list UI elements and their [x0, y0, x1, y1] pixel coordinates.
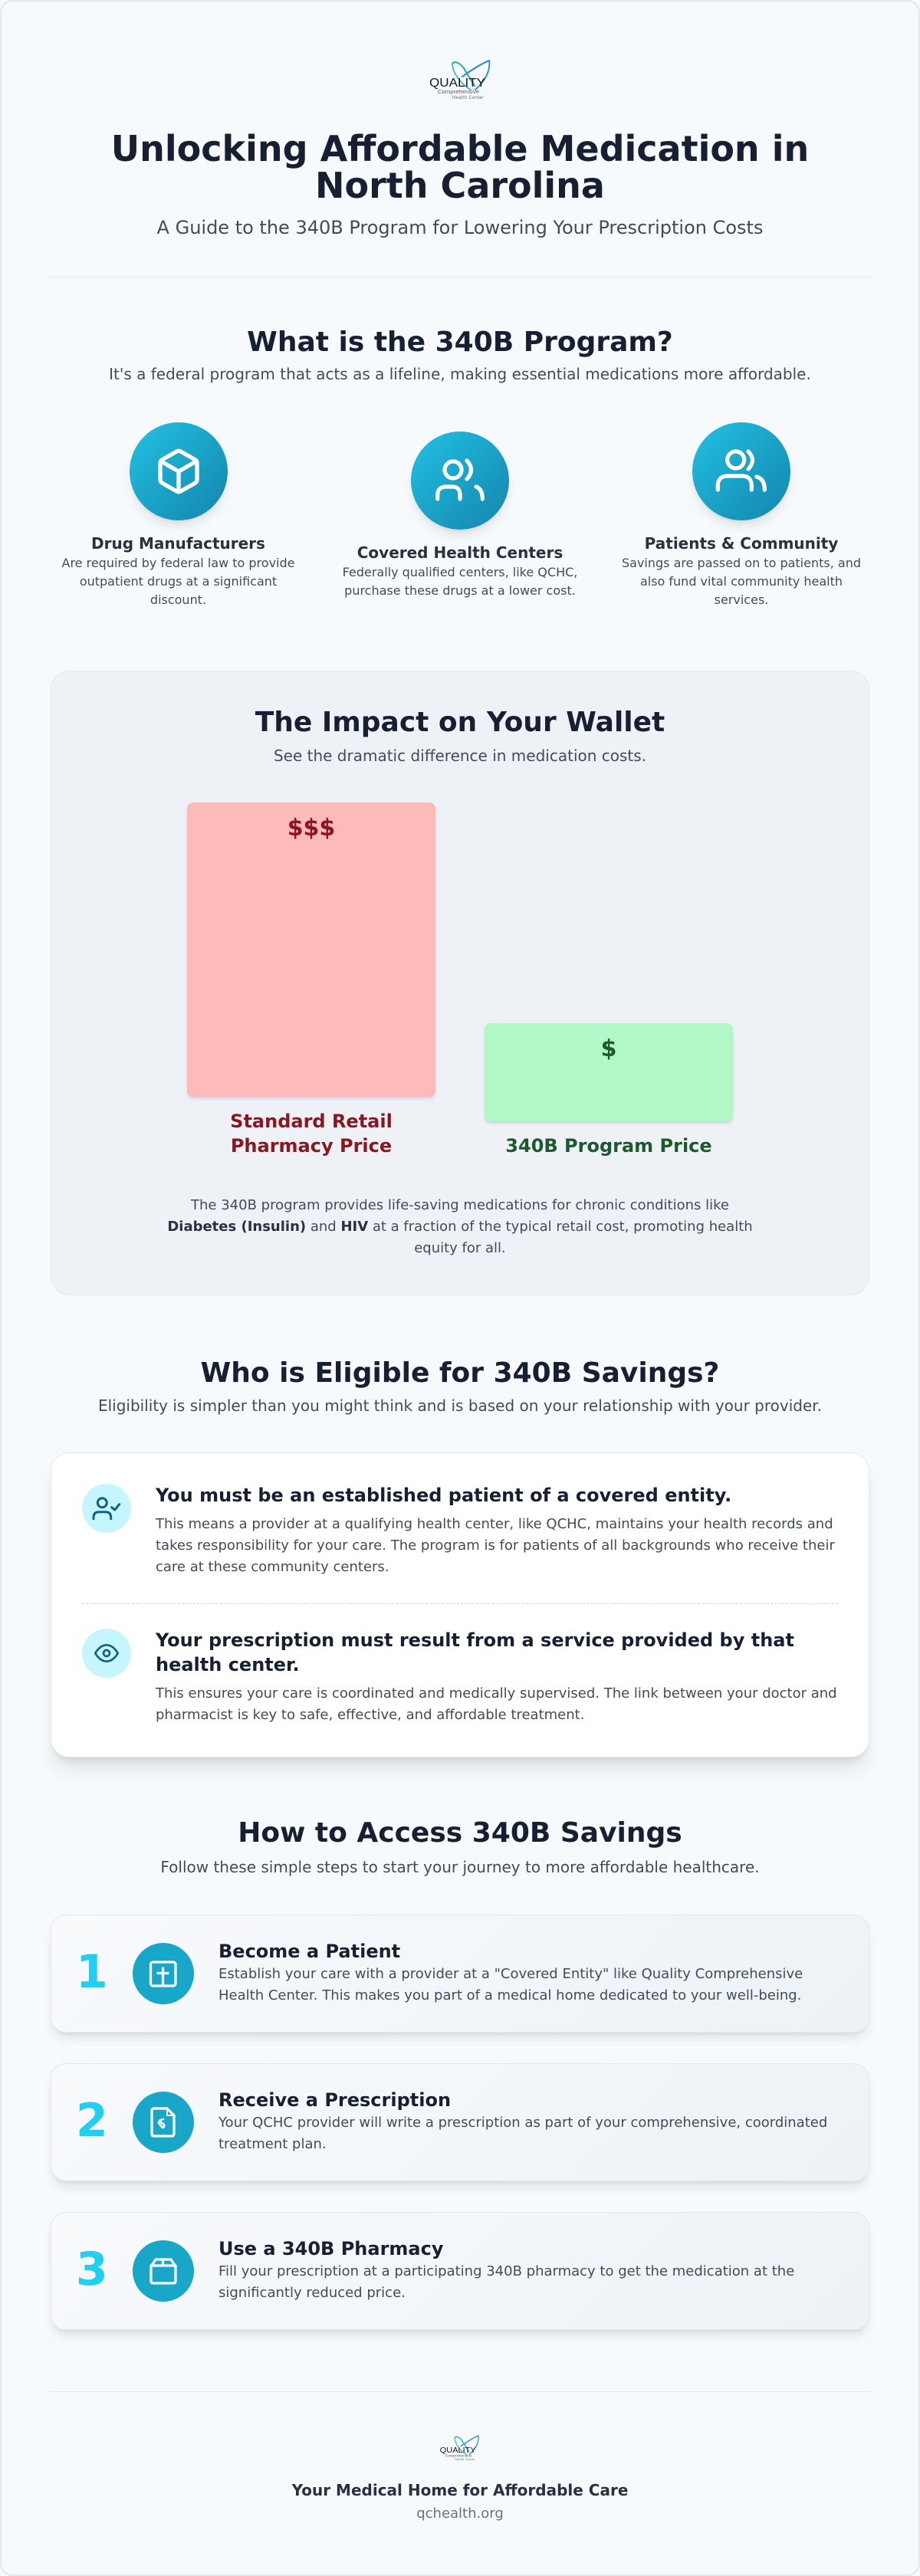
criterion heading: health center. [156, 1654, 300, 1675]
step text: significantly reduced price. [219, 2285, 406, 2301]
card description: outpatient drugs at a significant [80, 573, 277, 589]
icon: eye [82, 1629, 131, 1678]
criterion heading: You must be an established patient of a covered entity. [156, 1485, 731, 1506]
step number: 2 [76, 2094, 108, 2148]
icon: medical cross [133, 1943, 194, 2004]
bar chart [186, 802, 734, 1157]
criterion 2 [82, 1629, 837, 1723]
title: Unlocking Affordable Medication in [111, 128, 809, 169]
panel: eligibility criteria [51, 1452, 869, 1757]
icon: people [411, 432, 509, 530]
header [51, 60, 869, 277]
explanatory paragraph: The 340B program provides life-saving medications for chronic conditions like [191, 1197, 729, 1213]
card: patients and community [622, 422, 861, 607]
card: drug manufacturers [61, 422, 294, 607]
criterion text: This ensures your care is coordinated and medically supervised. The link between your doctor and [156, 1685, 837, 1701]
footer logo: QUALITY [440, 2446, 476, 2455]
card description: Are required by federal law to provide [61, 555, 294, 570]
step 1 [51, 1915, 869, 2033]
footer [51, 2391, 869, 2522]
criterion heading [155, 1629, 794, 1675]
card title: Patients & Community [645, 534, 838, 553]
step number: 3 [76, 2243, 108, 2296]
step text: Health Center. This makes you part of a medical home dedicated to your well-being. [219, 1987, 801, 2003]
footer url: qchealth.org [416, 2505, 504, 2522]
card description: services. [715, 592, 768, 607]
criterion text: This means a provider at a qualifying health center, like QCHC, maintains your health records and [156, 1516, 833, 1532]
card description: purchase these drugs at a lower cost. [344, 582, 576, 598]
bar label: Pharmacy Price [231, 1135, 392, 1157]
card description [343, 564, 577, 598]
explanatory paragraph [167, 1197, 753, 1256]
intro text: See the dramatic difference in medication costs. [274, 747, 646, 765]
title [111, 128, 809, 206]
criterion text: care at these community centers. [156, 1559, 389, 1575]
card: covered health centers [343, 432, 577, 598]
section heading: how to access [160, 1817, 760, 1876]
criterion text: takes responsibility for your care. The program is for patients of all backgrounds who receive their [156, 1537, 835, 1554]
step text: Fill your prescription at a participating 340B pharmacy to get the medication at the [219, 2263, 794, 2279]
criterion 1 [82, 1484, 835, 1575]
bar value: $ [601, 1035, 616, 1062]
subtitle: A Guide to the 340B Program for Lowering Your Prescription Costs [157, 217, 763, 238]
explanatory paragraph: Diabetes (Insulin) and HIV at a fraction of the typical retail cost, promoting health [167, 1219, 753, 1235]
logo: QUALITY [429, 77, 485, 90]
bar: 340B price [485, 1023, 733, 1121]
card description: also fund vital community health [640, 573, 843, 589]
criterion text [155, 1685, 837, 1723]
step text [219, 1966, 803, 2003]
footer tagline: Your Medical Home for Affordable Care [292, 2481, 628, 2499]
step 2 [51, 2063, 869, 2181]
criterion heading: Your prescription must result from a service provided by that [156, 1629, 794, 1651]
criterion text: pharmacist is key to safe, effective, and affordable treatment. [156, 1707, 584, 1723]
card description [61, 555, 294, 607]
card description: discount. [150, 592, 206, 607]
bar label: 340B Program Price [505, 1135, 712, 1157]
heading: What is the 340B Program? [247, 327, 673, 358]
logo [429, 60, 491, 100]
logo: Health Center [452, 96, 484, 100]
icon: people [692, 422, 790, 520]
step text [219, 2115, 827, 2152]
panel: impact on your wallet [51, 671, 869, 1295]
card title: Drug Manufacturers [91, 534, 265, 553]
intro text: Follow these simple steps to start your journey to more affordable healthcare. [160, 1858, 760, 1876]
bar label [230, 1111, 393, 1157]
card description: Federally qualified centers, like QCHC, [343, 564, 577, 579]
icon: person with check [82, 1484, 131, 1533]
bar value: $$$ [288, 815, 335, 842]
icon: prescription document [133, 2092, 194, 2153]
criterion text [155, 1516, 835, 1575]
step text: treatment plan. [219, 2136, 327, 2152]
card description: Savings are passed on to patients, and [622, 555, 861, 570]
icon: box [133, 2240, 194, 2302]
footer logo [440, 2435, 479, 2461]
card title: Covered Health Centers [357, 543, 563, 562]
logo: Comprehensive [438, 88, 479, 95]
heading: The Impact on Your Wallet [255, 707, 665, 737]
step 3 [51, 2212, 869, 2330]
step heading: Become a Patient [219, 1941, 400, 1962]
bar: retail price [187, 802, 435, 1097]
step text: Establish your care with a provider at a "Covered Entity" like Quality Comprehensive [219, 1966, 803, 1982]
footer logo: Health Center [455, 2458, 475, 2461]
step text: Your QCHC provider will write a prescription as part of your comprehensive, coordinated [219, 2115, 827, 2131]
intro text: Eligibility is simpler than you might think and is based on your relationship with your provider. [98, 1396, 822, 1415]
step number: 1 [76, 1945, 108, 1999]
section: what is the 340B program [61, 327, 861, 607]
heading: Who is Eligible for 340B Savings? [201, 1357, 719, 1389]
title: North Carolina [315, 165, 605, 206]
explanatory paragraph: equity for all. [414, 1240, 506, 1256]
step heading: Receive a Prescription [219, 2089, 451, 2111]
intro text: It's a federal program that acts as a lifeline, making essential medications more affordable. [109, 365, 811, 383]
card description [622, 555, 861, 607]
heading: How to Access 340B Savings [238, 1817, 682, 1849]
step text [219, 2263, 794, 2301]
section heading: who is eligible [98, 1357, 822, 1415]
icon: package [129, 422, 227, 520]
bar label: Standard Retail [230, 1111, 393, 1132]
footer logo: Comprehensive [445, 2454, 472, 2459]
step heading: Use a 340B Pharmacy [219, 2238, 443, 2259]
